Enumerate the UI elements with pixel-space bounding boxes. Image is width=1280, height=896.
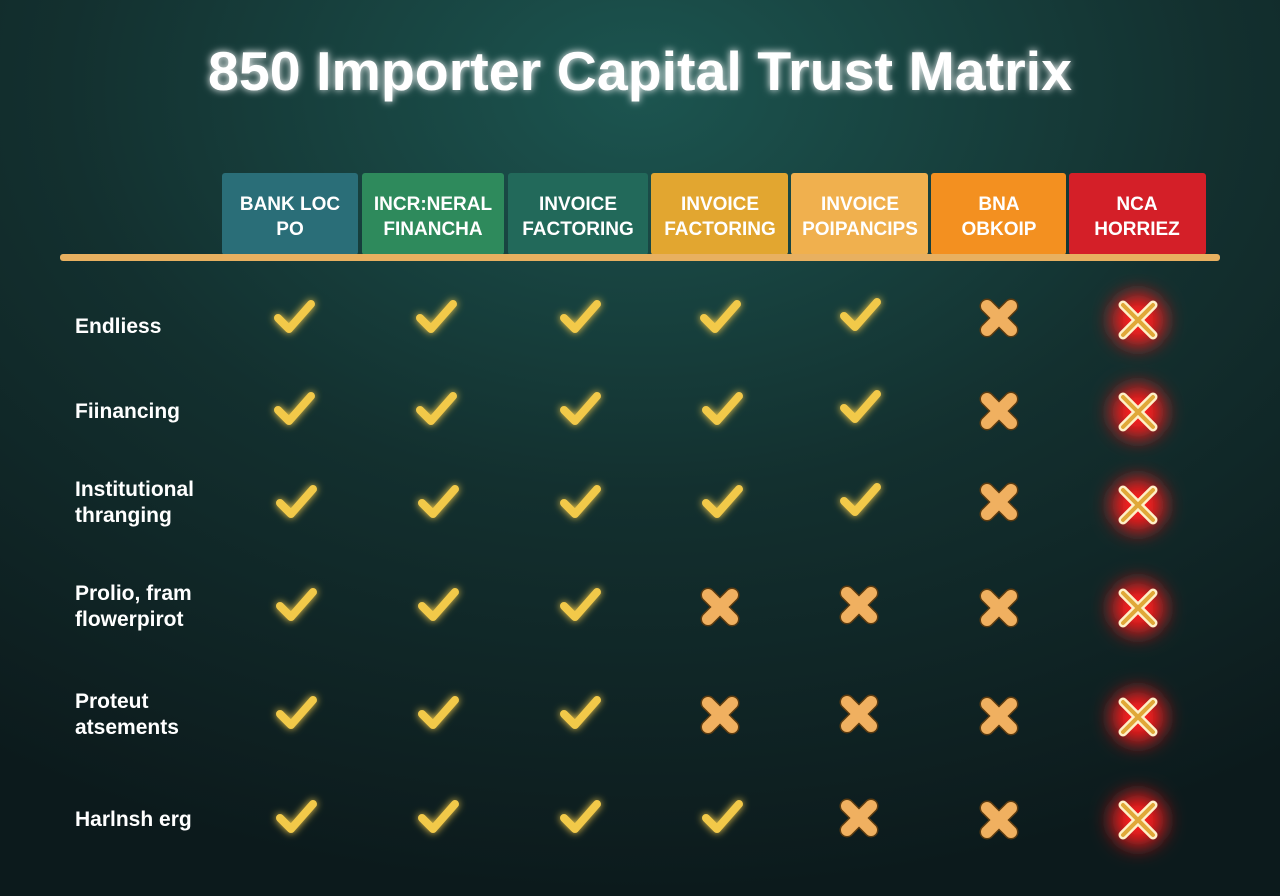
header: bank loc po: PO (276, 219, 304, 240)
header: incremental financing: INCR:NERAL (374, 194, 492, 215)
header: invoice poipancips: INVOICE (821, 194, 899, 215)
header: bna obkoip: OBKOIP (962, 219, 1037, 240)
row labels (75, 315, 194, 831)
header: bna obkoip (931, 173, 1066, 255)
row labels: Prolio, fram (75, 582, 192, 605)
matrix marks (278, 294, 1164, 846)
header: bna obkoip: BNA (978, 194, 1020, 215)
row labels: flowerpirot (75, 608, 184, 631)
title: 850 Importer Capital Trust Matrix (208, 40, 1072, 102)
header: invoice factoring 1: FACTORING (522, 219, 634, 240)
row labels: Institutional (75, 478, 194, 501)
header: nca horriez: NCA (1116, 194, 1158, 215)
row labels: Harlnsh erg (75, 808, 192, 831)
header: bank loc po (222, 173, 358, 255)
header: invoice poipancips (791, 173, 928, 255)
header: invoice factoring 2: INVOICE (681, 194, 759, 215)
header: invoice factoring 2: FACTORING (664, 219, 776, 240)
header: incremental financing (362, 173, 504, 255)
header: incremental financing: FINANCHA (383, 219, 483, 240)
header: nca horriez (1069, 173, 1206, 255)
header: invoice factoring 1 (508, 173, 648, 255)
row labels: thranging (75, 504, 172, 527)
header: nca horriez: HORRIEZ (1094, 219, 1180, 240)
header: bank loc po: BANK LOC (240, 194, 340, 215)
header: invoice factoring 1: INVOICE (539, 194, 617, 215)
row labels: Endliess (75, 315, 161, 338)
row labels: Fiinancing (75, 400, 180, 423)
header: invoice poipancips: POIPANCIPS (802, 219, 918, 240)
header: invoice factoring 2 (651, 173, 788, 255)
row labels: Proteut (75, 690, 149, 713)
row labels: atsements (75, 716, 179, 739)
header row (222, 173, 1206, 255)
